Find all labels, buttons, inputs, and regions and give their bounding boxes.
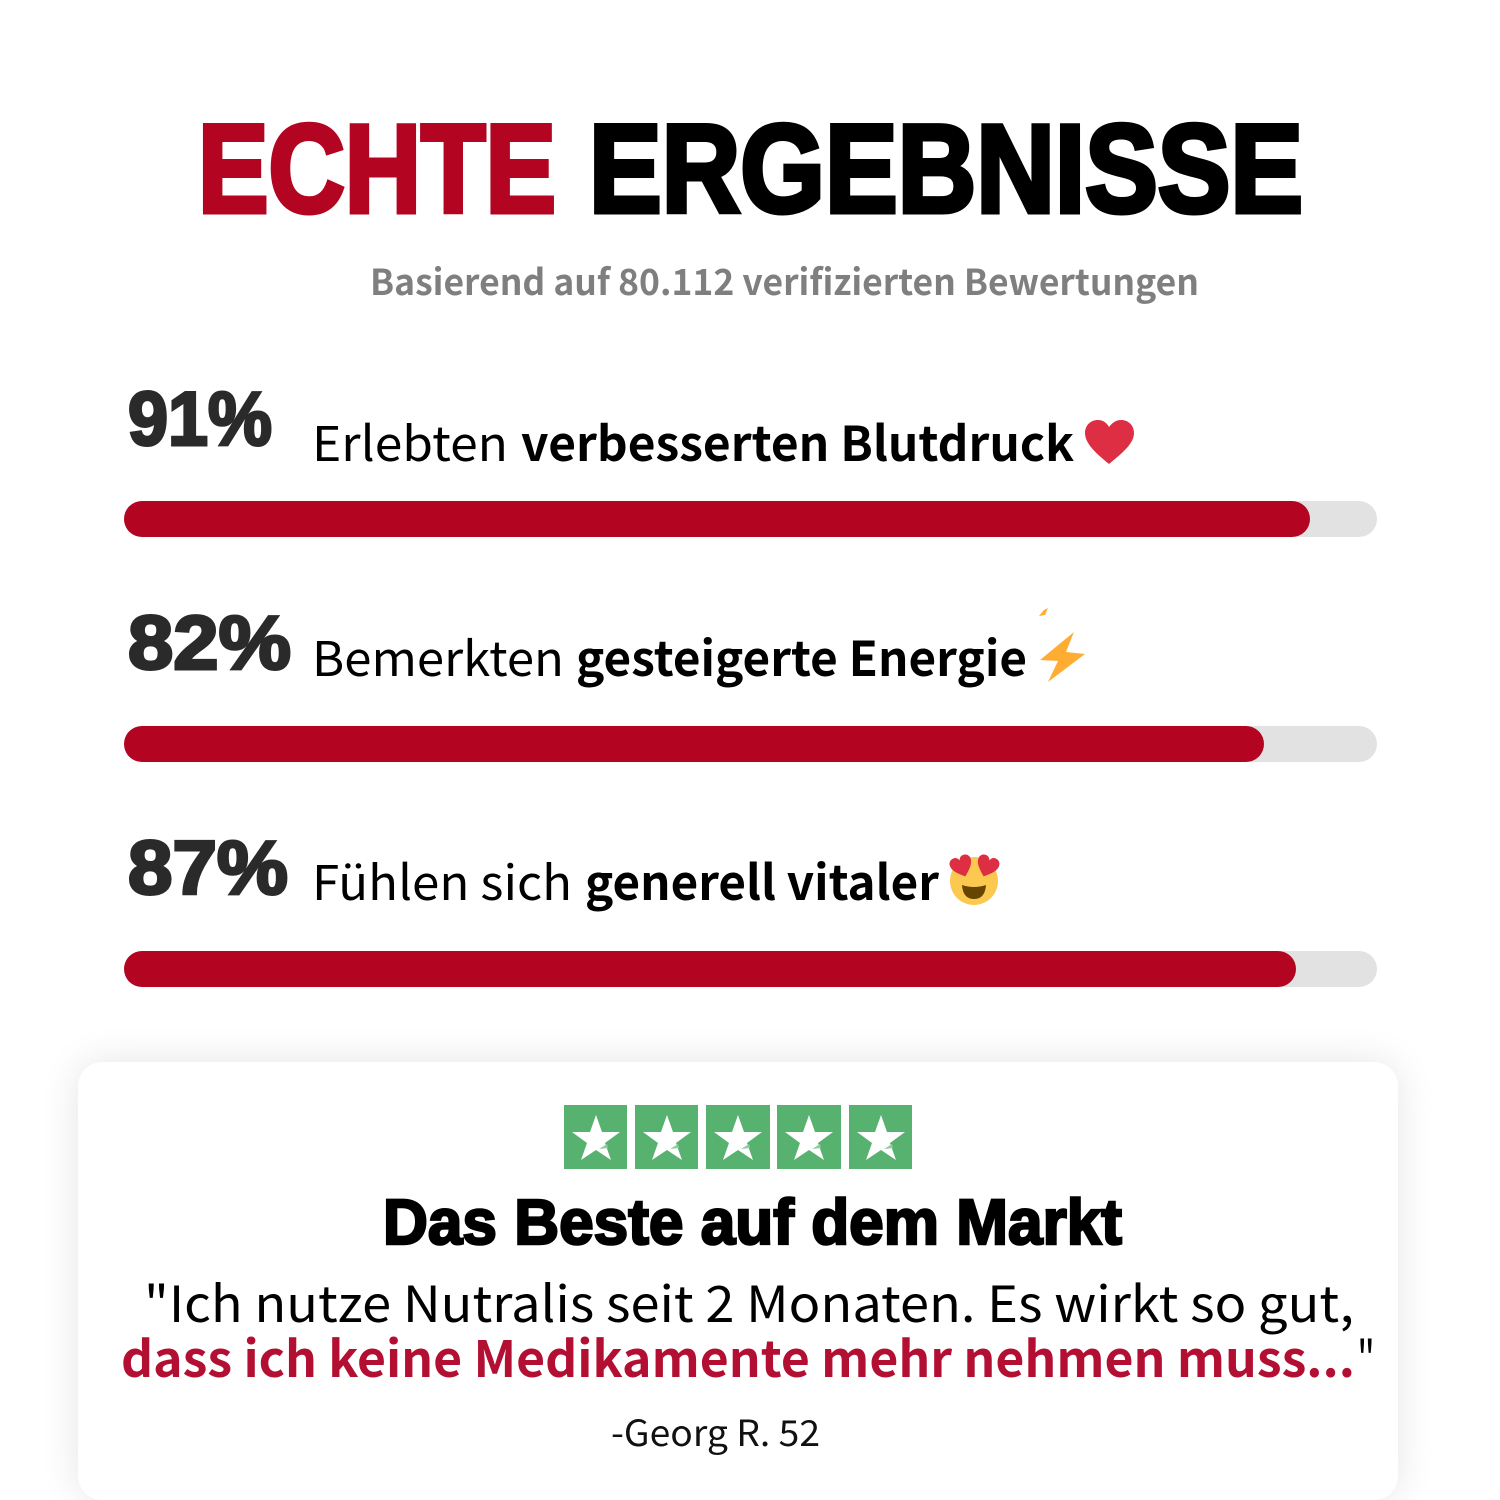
label: gesteigerte Energie: Bemerkten <box>312 620 564 690</box>
percentage: 82%: 82% <box>128 601 291 686</box>
title: ECHTE <box>198 100 556 239</box>
label: generell vitaler: generell vitaler <box>585 844 939 914</box>
icon: heart <box>1085 420 1134 464</box>
testimonial heading: Das Beste auf dem Markt <box>383 1186 1122 1258</box>
icon: five green rating stars <box>564 1105 912 1169</box>
stat row: 87% vitality <box>124 826 1377 987</box>
percentage: 91%: 91% <box>128 377 272 462</box>
progress bar: 82% <box>124 726 1377 762</box>
label: verbesserten Blutdruck: verbesserten Blutdruck <box>521 405 1074 475</box>
testimonial author: -Georg R. 52 <box>611 1405 820 1457</box>
percentage: 87%: 87% <box>128 826 288 911</box>
icon: heart-eyes emoji <box>948 853 1001 905</box>
title: ERGEBNISSE <box>589 100 1303 239</box>
testimonial quote: " <box>1357 1320 1375 1392</box>
testimonial quote <box>121 1265 1375 1392</box>
stat row: 82% energy <box>124 601 1377 762</box>
progress bar: 87% <box>124 951 1377 987</box>
icon: lightning bolt <box>1039 608 1085 682</box>
stat row: 91% blood pressure <box>124 377 1377 537</box>
label: gesteigerte Energie: gesteigerte Energie <box>576 620 1027 690</box>
testimonial quote: "Ich nutze Nutralis seit 2 Monaten. Es wirkt so gut, <box>144 1265 1354 1337</box>
progress bar: 91% <box>124 501 1377 537</box>
label: gesteigerte Energie <box>312 620 1027 690</box>
title <box>198 100 1303 239</box>
panel: testimonial card <box>78 1062 1398 1500</box>
subtitle: Basierend auf 80.112 verifizierten Bewertungen <box>370 254 1199 306</box>
label: generell vitaler: Fühlen sich <box>312 844 572 914</box>
testimonial quote: dass ich keine Medikamente mehr nehmen muss... <box>121 1320 1355 1392</box>
label: generell vitaler <box>312 844 939 914</box>
label: verbesserten Blutdruck: Erlebten <box>312 405 508 475</box>
